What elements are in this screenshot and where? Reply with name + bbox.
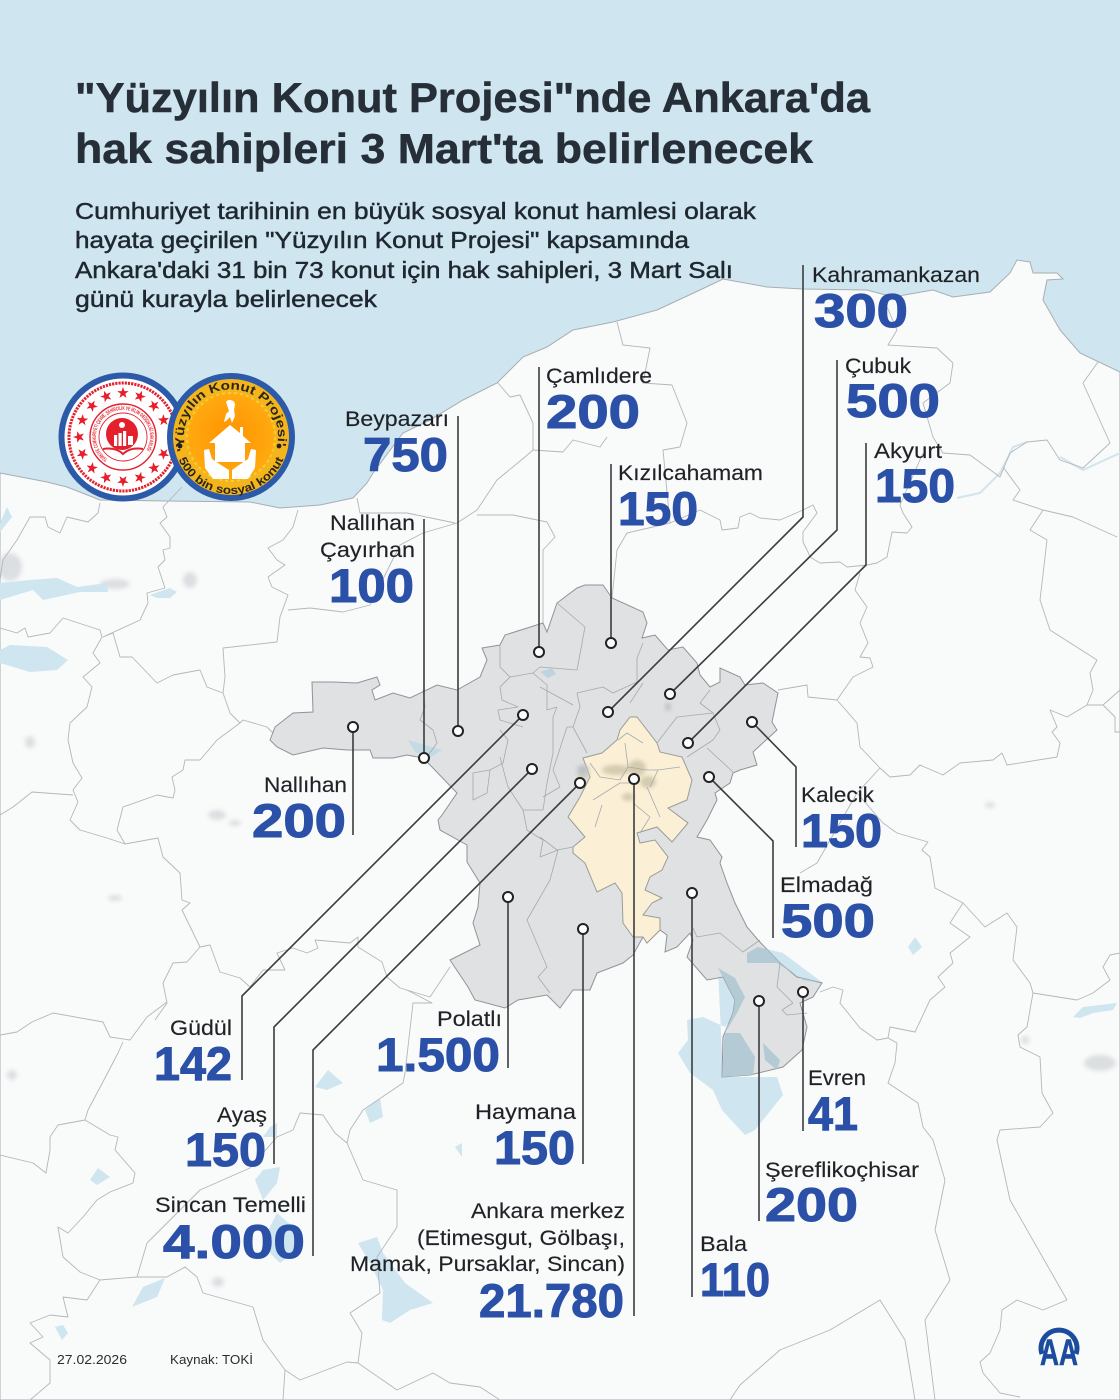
callout: Nallıhan 200: Nallıhan — [264, 774, 347, 797]
callout: Kahramankazan 300: Kahramankazan — [812, 264, 980, 287]
date and source: 27.02.2026 — [57, 1352, 127, 1367]
callout: Kızılcahamam 150: Kızılcahamam — [618, 462, 763, 485]
date and source — [57, 1352, 253, 1367]
callout: Polatlı 1.500 — [376, 892, 513, 1081]
callout: Sincan Temelli 4.000 — [155, 778, 585, 1268]
callout: Kızılcahamam 150: 150 — [618, 482, 698, 535]
callout: Beypazarı 750: Beypazarı — [345, 408, 449, 431]
callout: Ankara merkez 21.780 — [350, 774, 639, 1327]
callout: Polatlı 1.500: Polatlı — [437, 1008, 502, 1031]
intro paragraph — [75, 198, 757, 312]
callout: Ayaş 150: 150 — [185, 1123, 266, 1176]
callout: Ayaş 150 — [185, 764, 537, 1176]
callout: Bala 110: Bala — [700, 1233, 747, 1256]
callout: Akyurt 150: Akyurt — [874, 440, 942, 463]
callout: Ayaş 150: Ayaş — [217, 1104, 267, 1127]
title: hak sahipleri 3 Mart'ta belirlenecek — [75, 125, 814, 172]
callout: Kalecik 150: 150 — [801, 804, 882, 857]
callout: Ankara merkez 21.780: Mamak, Pursaklar, Sincan) — [350, 1253, 625, 1276]
icon: house in hands with key — [204, 400, 256, 479]
callout: Nallıhan Çayırhan 100: 100 — [329, 559, 414, 612]
callout: Güdül 142: Güdül — [170, 1017, 232, 1040]
callout: Nallıhan Çayırhan 100: Nallıhan — [330, 512, 415, 535]
callout: Ankara merkez 21.780: 21.780 — [479, 1274, 624, 1327]
callout: Ankara merkez 21.780: Ankara merkez — [471, 1200, 625, 1223]
logo: Yüzyılın Konut Projesi badge: 'Yüzyılın Konut Projesi' — [175, 382, 287, 452]
Ankara province map — [270, 585, 823, 1077]
yellow Ankara centre — [568, 717, 692, 943]
icon: AA logo: AA — [1040, 1332, 1078, 1373]
Tuz lake overlap — [408, 668, 823, 1077]
logo: ministry seal — [58, 372, 178, 502]
callout: Ankara merkez 21.780: (Etimesgut, Gölbaşı, — [417, 1227, 625, 1250]
callout: Kahramankazan 300 — [603, 264, 980, 717]
callout: Nallıhan Çayırhan 100: Çayırhan — [320, 539, 415, 562]
intro paragraph: Ankara'daki 31 bin 73 konut için hak sahipleri, 3 Mart Salı — [75, 257, 733, 283]
callout: Çamlıdere 200: 200 — [546, 385, 640, 438]
callout: Çamlıdere 200 — [534, 365, 652, 657]
title — [75, 74, 871, 172]
callout: Sincan Temelli 4.000: 4.000 — [163, 1215, 305, 1268]
callout: Güdül 142 — [154, 710, 528, 1090]
callout: Nallıhan 200: 200 — [252, 794, 346, 847]
callout: Çamlıdere 200: Çamlıdere — [546, 365, 652, 388]
callout: Kızılcahamam 150 — [606, 462, 763, 648]
callout: Güdül 142: 142 — [154, 1037, 232, 1090]
callout: Çubuk 500: Çubuk — [845, 355, 912, 378]
callout: Çubuk 500: 500 — [846, 374, 940, 427]
callout: Şereflikoçhisar 200: Şereflikoçhisar — [765, 1159, 919, 1182]
logos — [58, 372, 295, 502]
callout: Şereflikoçhisar 200: 200 — [765, 1178, 858, 1231]
callout: Evren 41 — [798, 987, 866, 1140]
callout: Haymana 150: Haymana — [475, 1101, 576, 1124]
callout: Nallıhan Çayırhan 100 — [320, 512, 429, 763]
district borders — [420, 603, 807, 1015]
intro paragraph: hayata geçirilen "Yüzyılın Konut Projesi" kapsamında — [75, 227, 689, 253]
callout: Kalecik 150: Kalecik — [801, 784, 875, 807]
icon: AA logo — [1040, 1330, 1078, 1373]
callout: Beypazarı 750: 750 — [363, 428, 448, 481]
callout: Kalecik 150 — [747, 717, 882, 857]
city centre patch — [577, 760, 656, 801]
logo: ministry seal: TÜRKİYE CUMHURİYETİ ÇEVRE, ŞEHİRCİLİK VE İKLİM DEĞİŞİKLİĞİ BAKANLIĞI — [92, 405, 154, 462]
title: "Yüzyılın Konut Projesi"nde Ankara'da — [75, 74, 871, 121]
callout: Haymana 150 — [475, 924, 588, 1174]
callout: Elmadağ 500: 500 — [781, 894, 875, 947]
callout: Haymana 150: 150 — [494, 1121, 575, 1174]
callout: Akyurt 150: 150 — [875, 459, 955, 512]
callout: Beypazarı 750 — [345, 408, 463, 736]
callout: Akyurt 150 — [683, 440, 955, 748]
callout: Sincan Temelli 4.000: Sincan Temelli — [155, 1194, 306, 1217]
callout: Bala 110: 110 — [700, 1253, 770, 1306]
callout: Kahramankazan 300: 300 — [814, 284, 908, 337]
callout: Elmadağ 500 — [704, 772, 875, 947]
intro paragraph: günü kurayla belirlenecek — [75, 286, 378, 312]
gray districts — [270, 585, 822, 1077]
intro paragraph: Cumhuriyet tarihinin en büyük sosyal konut hamlesi olarak — [75, 198, 757, 224]
logo: Yüzyılın Konut Projesi badge: 500 bin sosyal konut — [180, 456, 284, 496]
date and source: Kaynak: TOKİ — [170, 1352, 253, 1367]
callout: Elmadağ 500: Elmadağ — [780, 874, 873, 897]
callout: Evren 41: Evren — [808, 1067, 866, 1090]
callout: Nallıhan 200 — [252, 722, 358, 847]
callout: Bala 110 — [687, 888, 770, 1306]
callout: Polatlı 1.500: 1.500 — [376, 1028, 500, 1081]
logo: Yüzyılın Konut Projesi badge — [167, 373, 295, 501]
callout: Çubuk 500 — [665, 355, 940, 699]
callout: Evren 41: 41 — [808, 1087, 858, 1140]
callout: Şereflikoçhisar 200 — [754, 996, 919, 1231]
